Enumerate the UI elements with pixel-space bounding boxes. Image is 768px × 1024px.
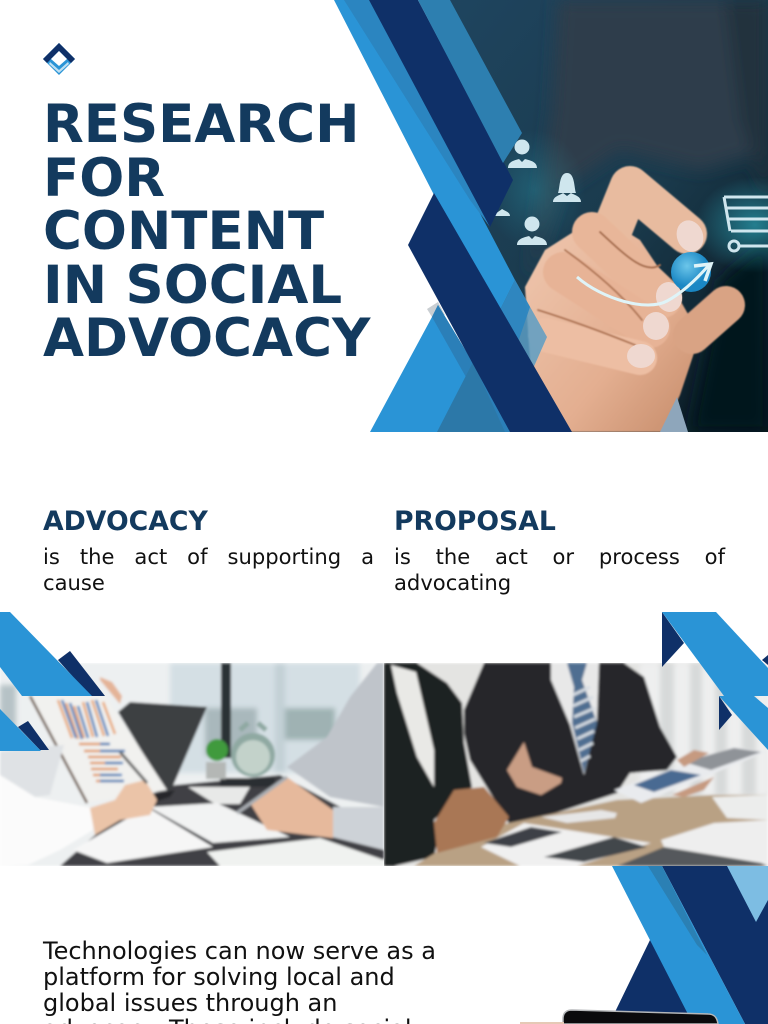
icon: blue ball [671, 252, 711, 292]
hand [525, 186, 726, 432]
title: FOR [43, 148, 165, 208]
phone [563, 1010, 718, 1024]
title: CONTENT [43, 201, 324, 262]
text: technologies paragraph: platform for solving local and [43, 963, 395, 991]
icon: shopping cart [724, 197, 768, 251]
tablet clipboard [614, 747, 766, 803]
calculator [541, 810, 617, 823]
striped tie [567, 663, 597, 773]
title [43, 94, 371, 369]
documents on desk [481, 795, 768, 866]
person left in white shirt [0, 745, 64, 797]
title: ADVOCACY [43, 308, 370, 369]
shirt cuff [660, 397, 688, 432]
text: technologies paragraph: global issues through an [43, 989, 337, 1017]
text: technologies paragraph: Technologies can now serve as a [43, 937, 436, 965]
arrow [577, 264, 711, 305]
icon: logo diamond [43, 43, 75, 75]
gesturing hand [507, 742, 562, 795]
fingernails [627, 217, 708, 368]
laptop [118, 702, 207, 793]
heading: proposal: PROPOSAL [394, 506, 556, 537]
suit [530, 0, 768, 432]
chevron shapes: hero [334, 0, 572, 432]
photo: business team reviewing documents [384, 663, 768, 866]
phone on desk [220, 778, 275, 787]
heading: advocacy: ADVOCACY [43, 506, 208, 537]
calculator [188, 787, 250, 804]
desk [414, 795, 768, 866]
text: technologies paragraph [42, 937, 436, 1024]
person right in gray shirt [287, 663, 384, 807]
clasped hands [434, 787, 509, 853]
icon: people [495, 140, 581, 245]
clipboard with charts [30, 683, 167, 803]
title: RESEARCH [43, 94, 359, 155]
chevron shapes: left photo [0, 612, 105, 751]
screen glow [702, 182, 768, 269]
hero photo: hand drawing on screen [430, 0, 768, 432]
chevron shapes: bottom section [520, 866, 768, 1024]
title: IN SOCIAL [43, 254, 342, 316]
text: proposal definition: is the act or process of advocating [394, 544, 725, 595]
photo: business analysis at desk [0, 663, 384, 866]
plant [206, 739, 228, 779]
chevron shapes: right photo [662, 612, 768, 750]
text: advocacy definition: is the act of supporting a cause [43, 544, 374, 595]
man in suit [464, 663, 677, 825]
desk [60, 775, 384, 866]
woman in suit [384, 663, 472, 866]
papers on desk [149, 803, 290, 843]
alarm clock [231, 723, 275, 777]
